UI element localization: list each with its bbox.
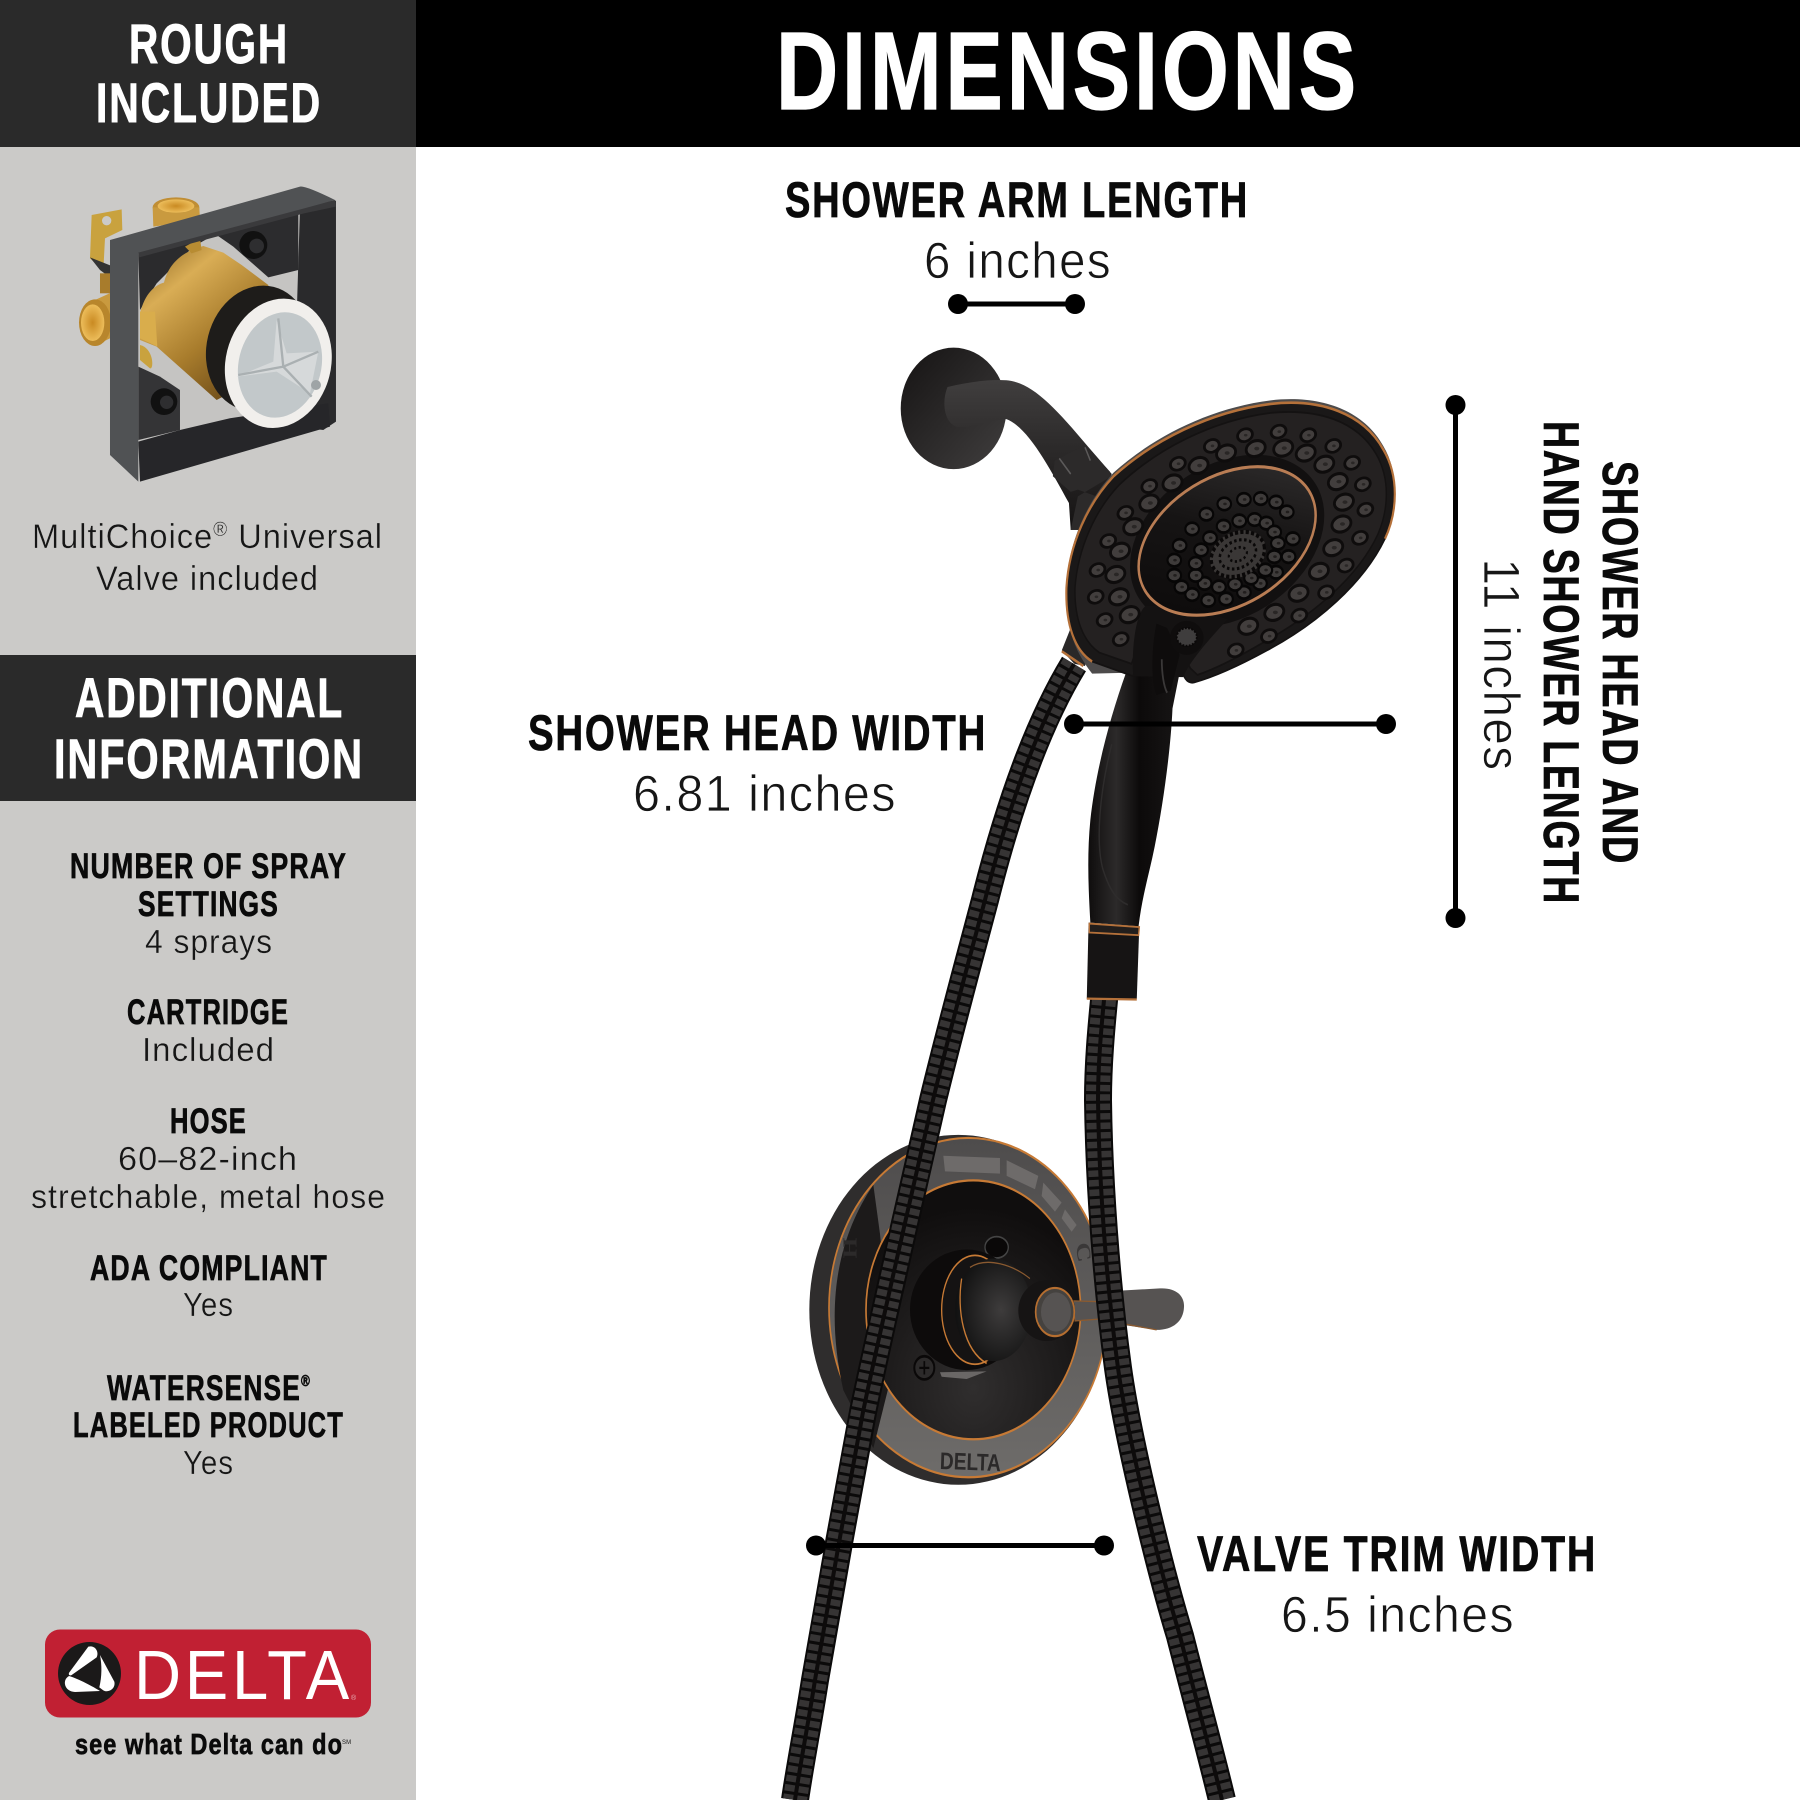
- image: right hose: [1098, 990, 1222, 1800]
- text: number of spray settings: 4 sprays: [145, 923, 273, 960]
- text: shower head width: SHOWER HEAD WIDTH: [528, 705, 987, 761]
- text: valve trim width: 6.5 inches: [1281, 1586, 1515, 1643]
- text: cartridge: Included: [142, 1031, 275, 1068]
- text: number of spray settings: NUMBER OF SPRAY: [70, 847, 347, 886]
- text: cartridge: CARTRIDGE: [127, 993, 289, 1032]
- heading: rough included: ROUGH: [129, 12, 289, 75]
- text: valve caption: [32, 518, 383, 598]
- logo: delta: see what Delta can do: [75, 1729, 343, 1761]
- image: left hose: [795, 664, 1074, 1800]
- text: valve caption: Universal: [228, 518, 383, 556]
- text: valve caption: Valve included: [96, 560, 319, 598]
- text: shower head and hand shower length: HAND SHOWER LENGTH: [1533, 421, 1589, 905]
- center spray cluster: [1205, 523, 1270, 586]
- logo: delta: [45, 1630, 371, 1761]
- text: hose: HOSE: [170, 1102, 247, 1141]
- spray switch: [1152, 621, 1204, 695]
- text: valve caption: MultiChoice: [32, 518, 221, 556]
- text: delta mark on valve trim: DELTA: [939, 1448, 1001, 1477]
- outer nozzles: [1086, 422, 1375, 660]
- text: hose: stretchable, metal hose: [31, 1178, 386, 1215]
- panel: left sidebar: [0, 0, 416, 1800]
- text: shower arm length: [785, 172, 1249, 289]
- text: watersense: LABELED PRODUCT: [73, 1406, 344, 1445]
- text: shower head width: [528, 705, 987, 822]
- text: shower head width: 6.81 inches: [633, 765, 897, 822]
- logo: delta: DELTA: [134, 1636, 353, 1714]
- heading: dimensions banner: [416, 0, 1800, 147]
- logo: delta: ®: [351, 1694, 357, 1702]
- heading: additional information: [0, 655, 416, 801]
- text: shower head and hand shower length: 11 inches: [1473, 558, 1530, 772]
- text: hose: 60–82-inch: [118, 1140, 298, 1177]
- text: watersense: [73, 1369, 344, 1481]
- image: valve trim: H: [840, 1238, 862, 1258]
- text: hose: [31, 1102, 386, 1215]
- logo: delta: SM: [342, 1740, 351, 1746]
- text: watersense: Yes: [183, 1444, 234, 1481]
- arrow: shower head dimension: [1064, 714, 1396, 734]
- heading: rough included: INCLUDED: [96, 71, 322, 134]
- text: cartridge: [127, 993, 289, 1068]
- text: valve caption: ®: [213, 519, 228, 541]
- image: valve trim: [809, 1135, 1184, 1485]
- image: shower arm and hand shower: [901, 348, 1395, 999]
- text: number of spray settings: SETTINGS: [138, 885, 279, 924]
- text: watersense: ®: [301, 1373, 311, 1390]
- text: shower arm length: SHOWER ARM LENGTH: [785, 172, 1249, 228]
- heading: additional information: ADDITIONAL: [75, 666, 344, 729]
- text: shower head and hand shower length: SHOWER HEAD AND: [1592, 461, 1648, 865]
- text: shower head and hand shower length: [1473, 421, 1648, 905]
- text: ada compliant: ADA COMPLIANT: [90, 1249, 328, 1288]
- arrow: shower arm dimension: [948, 294, 1085, 314]
- text: ada compliant: Yes: [183, 1286, 234, 1323]
- text: ada compliant: [90, 1249, 328, 1323]
- icon: rough-in valve: [79, 187, 345, 482]
- heading: rough included: [0, 0, 416, 147]
- arrow: valve trim dimension: [806, 1536, 1114, 1556]
- text: valve trim width: [1197, 1526, 1597, 1643]
- inner nozzles: [1166, 491, 1301, 608]
- heading: additional information: INFORMATION: [54, 727, 364, 790]
- arrow: length dimension: [1446, 395, 1466, 928]
- heading: dimensions banner: DIMENSIONS: [776, 10, 1360, 133]
- text: number of spray settings: [70, 847, 347, 960]
- text: valve trim width: VALVE TRIM WIDTH: [1197, 1526, 1597, 1582]
- image: valve trim: C: [1071, 1240, 1095, 1264]
- text: watersense: WATERSENSE: [107, 1369, 365, 1408]
- text: shower arm length: 6 inches: [924, 232, 1112, 289]
